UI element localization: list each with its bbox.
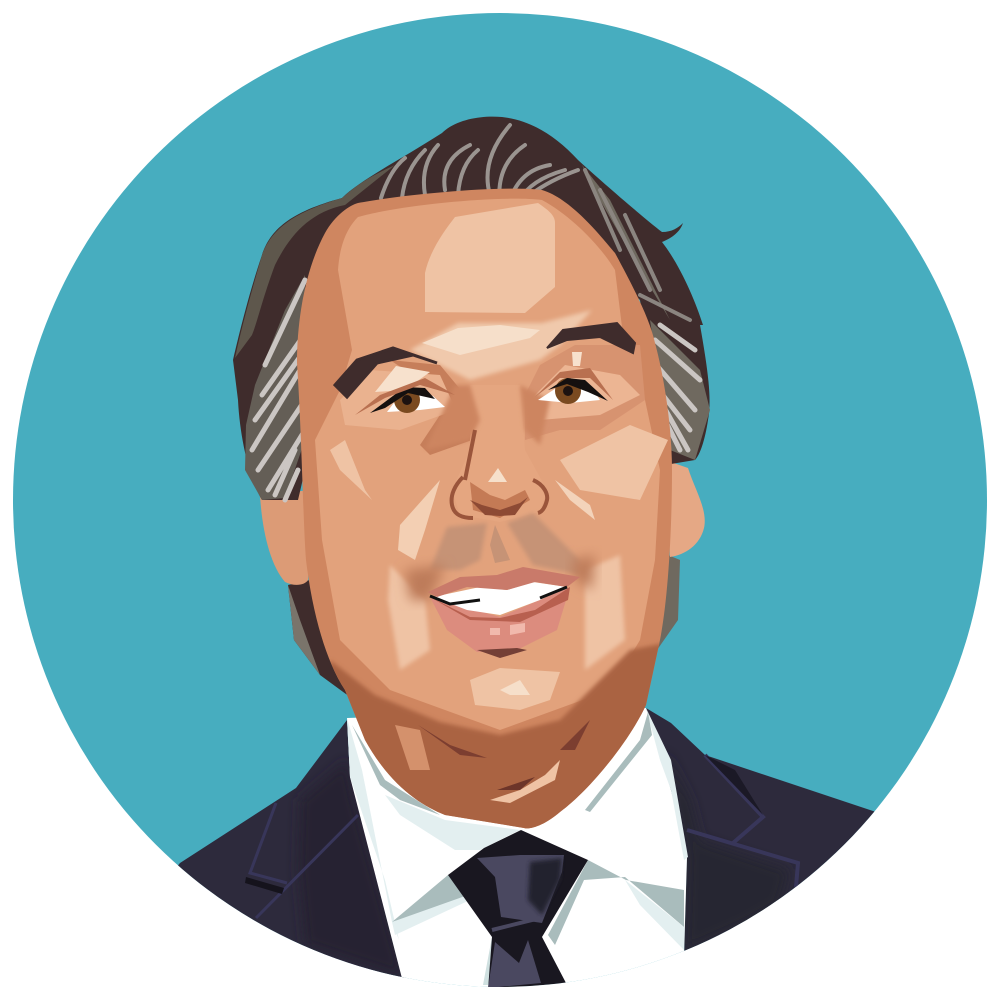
right eyebrow [547,323,635,353]
stubble around mouth [405,513,595,600]
face base [297,188,672,828]
face [297,188,672,828]
hair strokes: grey crown [381,125,690,320]
right eye [535,368,613,404]
hair back [288,555,680,697]
hair [233,117,710,500]
figure [150,117,900,1000]
jaw shading [330,642,659,828]
eye socket shadows and cheeks [330,345,668,670]
nose [425,385,550,522]
left eye [355,378,455,415]
tie [448,830,588,990]
mouth [428,567,580,658]
forehead [315,199,660,730]
chin and jaw highlights [395,668,590,803]
suit jacket [178,708,874,978]
left eyebrow [335,348,437,397]
hair strokes: grey temples [252,280,700,500]
ear left [260,490,312,585]
shirt and collar [347,708,688,1000]
ear right [670,463,705,557]
